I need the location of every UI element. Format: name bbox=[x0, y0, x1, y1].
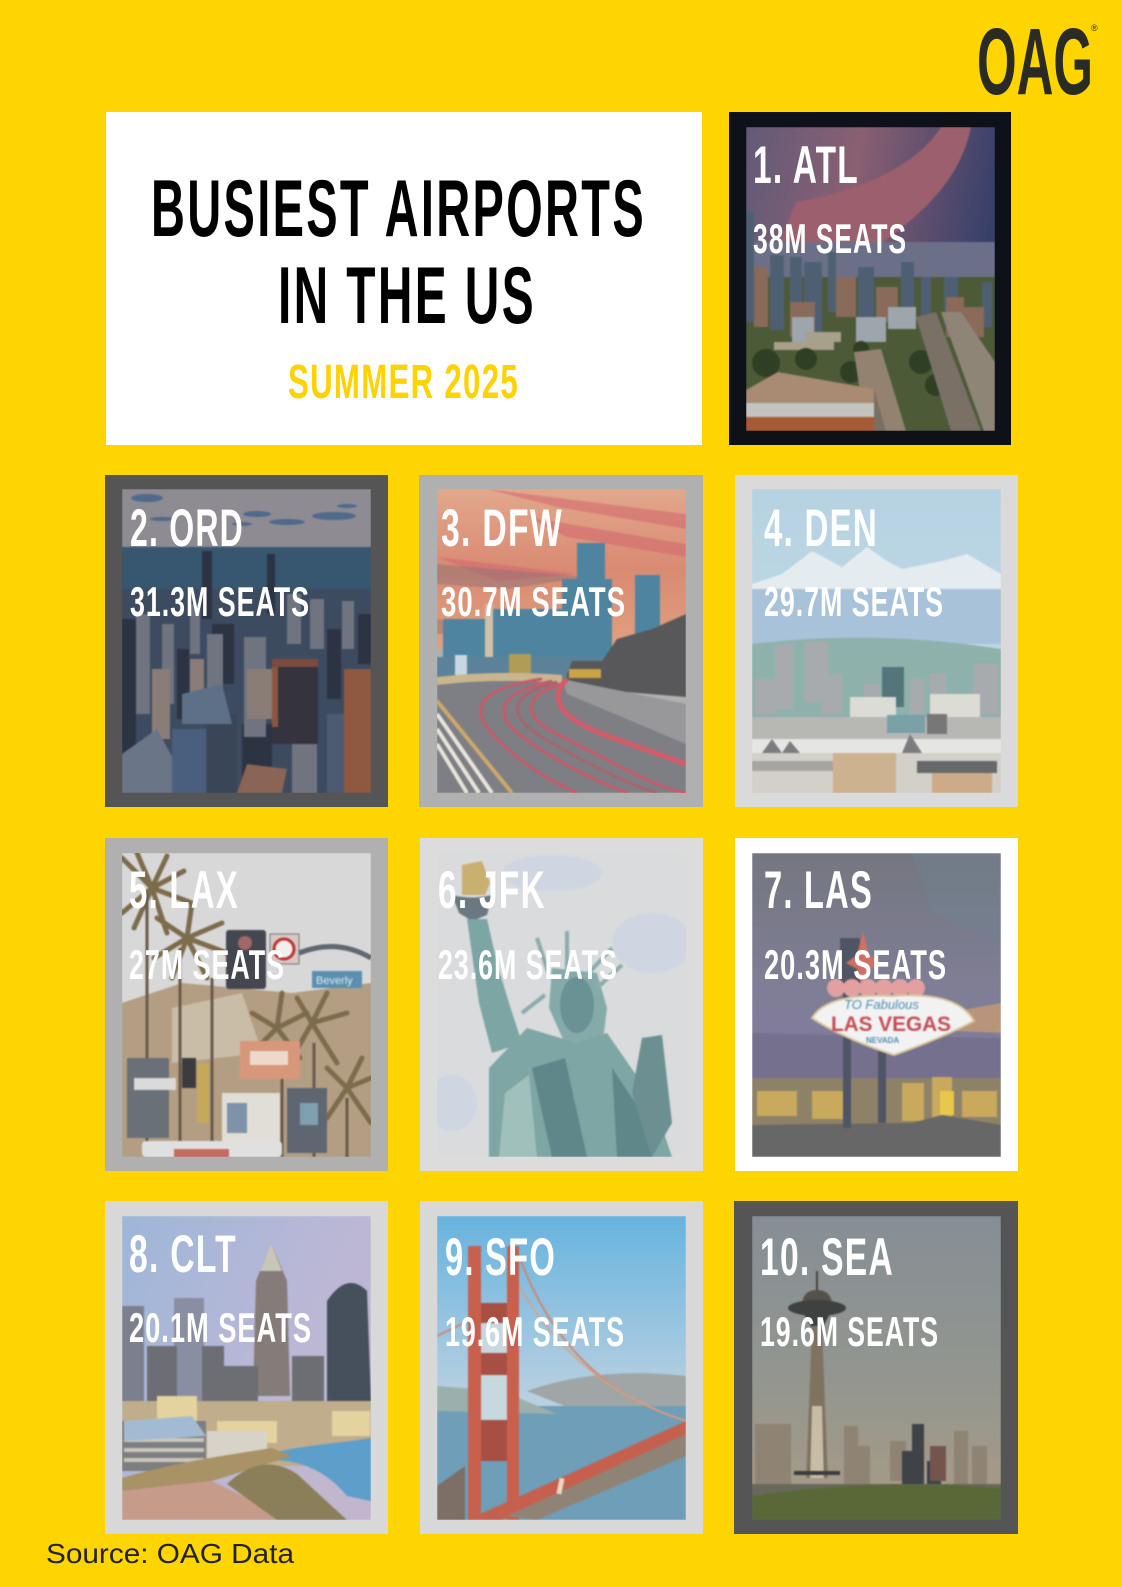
value: 19.6M SEATS bbox=[760, 1308, 939, 1355]
label: 5. LAX bbox=[129, 861, 239, 920]
label: 10. SEA bbox=[760, 1228, 894, 1287]
value: 27M SEATS bbox=[129, 941, 285, 988]
photo: Statue of Liberty bbox=[437, 855, 686, 1157]
photo: Las Vegas sign: NEVADA bbox=[866, 1036, 899, 1045]
panel: 7 LAS bbox=[735, 838, 1018, 1171]
source note: Source: OAG Data bbox=[46, 1538, 294, 1569]
panel: 5 LAX bbox=[105, 838, 388, 1171]
panel: 8 CLT bbox=[105, 1201, 388, 1534]
value: 23.6M SEATS bbox=[438, 941, 618, 988]
label: 4. DEN bbox=[764, 499, 878, 558]
photo: Dallas highway bbox=[437, 489, 686, 793]
photo: Los Angeles street bbox=[122, 853, 371, 1157]
value: 30.7M SEATS bbox=[441, 578, 626, 625]
value: 20.3M SEATS bbox=[764, 941, 947, 988]
panel: 1 ATL bbox=[729, 112, 1011, 445]
photo: Las Vegas sign: TO Fabulous bbox=[844, 997, 919, 1012]
label: 2. ORD bbox=[130, 499, 244, 558]
value: 38M SEATS bbox=[753, 215, 907, 262]
photo: Las Vegas sign bbox=[752, 853, 1001, 1157]
photo: Denver skyline bbox=[752, 489, 1001, 793]
panel: 4 DEN bbox=[735, 475, 1018, 807]
value: 20.1M SEATS bbox=[129, 1304, 312, 1351]
panel: 10 SEA bbox=[734, 1201, 1018, 1534]
panel: 3 DFW bbox=[419, 475, 703, 807]
value: 31.3M SEATS bbox=[130, 578, 310, 625]
heading: IN THE US bbox=[278, 251, 536, 341]
subheading: SUMMER 2025 bbox=[288, 356, 519, 409]
logo: OAG: ® bbox=[1091, 23, 1098, 33]
photo: Charlotte skyline bbox=[122, 1216, 371, 1520]
photo: Los Angeles street: Beverly bbox=[316, 975, 353, 987]
heading: BUSIEST AIRPORTS bbox=[151, 164, 646, 254]
value: 29.7M SEATS bbox=[764, 578, 944, 625]
photo: Golden Gate Bridge bbox=[437, 1216, 686, 1520]
photo: Las Vegas sign: LAS VEGAS bbox=[831, 1013, 951, 1036]
label: 1. ATL bbox=[753, 136, 859, 195]
value: 19.6M SEATS bbox=[445, 1308, 625, 1355]
label: 6. JFK bbox=[438, 861, 546, 920]
label: 3. DFW bbox=[441, 499, 563, 558]
label: 7. LAS bbox=[764, 861, 873, 920]
photo: Seattle Space Needle bbox=[752, 1216, 1001, 1520]
panel: title bbox=[106, 112, 702, 445]
photo: Chicago skyline bbox=[122, 489, 371, 793]
panel: 6 JFK bbox=[420, 838, 703, 1171]
label: 8. CLT bbox=[129, 1225, 237, 1284]
label: 9. SFO bbox=[445, 1228, 556, 1287]
heading bbox=[151, 164, 646, 341]
panel: 2 ORD bbox=[105, 475, 388, 807]
panel: 9 SFO bbox=[420, 1201, 703, 1534]
photo: Atlanta skyline bbox=[746, 127, 995, 431]
